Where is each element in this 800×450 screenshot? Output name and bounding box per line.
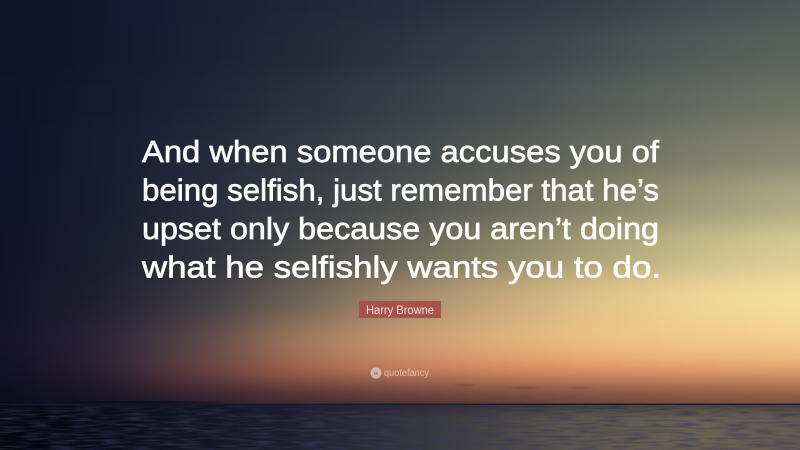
author tag: Harry Browne: Harry Browne — [366, 305, 434, 317]
author tag: Harry Browne — [359, 301, 441, 318]
logo: quotefancy: quotefancy — [384, 368, 429, 379]
quote text: what he selfishly wants you to do. — [141, 250, 661, 284]
quote text: being selfish, just remember that he’s — [142, 172, 659, 208]
quote text: And when someone accuses you of — [142, 134, 659, 169]
logo: quotefancy: “ — [374, 370, 378, 382]
quote text — [141, 134, 661, 284]
logo: quotefancy — [370, 368, 429, 382]
background: sea — [0, 404, 800, 450]
quote text: upset only because you aren’t doing — [142, 211, 659, 246]
